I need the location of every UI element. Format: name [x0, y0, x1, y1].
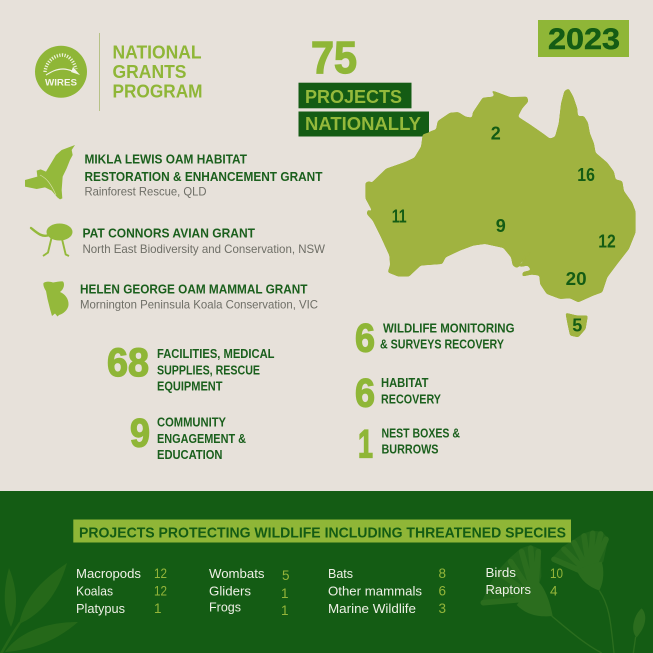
map of Australia with project counts	[365, 88, 636, 337]
decoration: gum blossoms	[481, 531, 645, 653]
map of Australia with project counts: 20	[566, 269, 587, 289]
map of Australia with project counts: 5	[572, 316, 582, 336]
bud	[633, 608, 645, 637]
list column 1	[76, 566, 167, 616]
stat: 6 wildlife monitoring	[355, 317, 514, 361]
flower left	[481, 545, 553, 616]
stat: 68 facilities: SUPPLIES, RESCUE	[157, 363, 260, 377]
stat: 9 community: 9	[130, 412, 150, 456]
map of Australia with project counts: 9	[496, 216, 506, 236]
list column 3: Bats	[328, 567, 353, 581]
stat: 1 nest boxes	[358, 422, 460, 466]
stat: 68 facilities: FACILITIES, MEDICAL	[157, 347, 275, 361]
icon: emu	[31, 224, 72, 256]
map of Australia with project counts: 16	[577, 165, 595, 185]
list column 1: 12	[154, 584, 167, 599]
stat: 1 nest boxes: 1	[358, 422, 373, 466]
title: national grants program	[112, 42, 202, 102]
list column 1: 1	[154, 601, 162, 616]
text: Helen George grant: HELEN GEORGE OAM MAMMAL GRANT	[80, 282, 308, 296]
list column 1: Platypus	[76, 602, 125, 616]
list column 2	[209, 567, 290, 618]
banner: section heading: PROJECTS PROTECTING WILDLIFE INCLUDING THREATENED SPECIES	[79, 524, 566, 541]
stat: 6 habitat recovery: RECOVERY	[381, 392, 442, 406]
stat: 6 wildlife monitoring: 6	[355, 317, 375, 361]
list column 4: 10	[550, 566, 563, 581]
decoration: gum leaves	[0, 563, 78, 653]
map of Australia with project counts: 11	[392, 207, 407, 227]
list column 3: Marine Wildlife	[328, 602, 416, 616]
icon: flying fox	[25, 145, 75, 199]
stat: 6 habitat recovery: HABITAT	[381, 376, 429, 390]
title: national grants program: PROGRAM	[112, 80, 202, 102]
text: Mikla Lewis grant	[84, 153, 323, 198]
stat: 75 projects nationally: NATIONALLY	[305, 114, 421, 134]
list column 2: Frogs	[209, 601, 241, 615]
icon: koala	[43, 281, 69, 316]
text: Pat Connors grant	[82, 226, 326, 256]
year badge	[538, 20, 629, 57]
text: Mikla Lewis grant: RESTORATION & ENHANCEMENT GRANT	[84, 170, 323, 184]
year badge: 2023	[548, 23, 620, 56]
list column 4: Birds	[486, 566, 516, 580]
stat: 6 wildlife monitoring: & SURVEYS RECOVERY	[380, 338, 505, 352]
list column 2: Gliders	[209, 585, 251, 599]
text: Helen George grant: Mornington Peninsula Koala Conservation, VIC	[80, 298, 318, 312]
stat: 68 facilities: 68	[107, 341, 149, 385]
list column 4	[486, 566, 563, 599]
list column 3: 3	[438, 601, 446, 616]
stat: 9 community: ENGAGEMENT &	[157, 432, 246, 446]
stat: 6 habitat recovery	[355, 372, 442, 416]
list column 1: 12	[154, 566, 167, 581]
panel: wildlife species	[0, 491, 653, 653]
list column 2: 5	[282, 568, 290, 583]
stat: 68 facilities: EQUIPMENT	[157, 380, 223, 394]
stat: 9 community: COMMUNITY	[157, 416, 227, 430]
stat: 75 projects nationally	[298, 32, 429, 136]
list column 3: Other mammals	[328, 585, 422, 599]
map of Australia with project counts: 12	[598, 232, 616, 252]
list column 1: Koalas	[76, 585, 113, 599]
text: Helen George grant	[80, 282, 318, 312]
text: Pat Connors grant: North East Biodiversity and Conservation, NSW	[82, 242, 326, 256]
title: national grants program: NATIONAL	[112, 42, 202, 62]
stat: 75 projects nationally: PROJECTS	[305, 87, 402, 107]
list column 3: 8	[438, 566, 446, 581]
stat: 9 community: EDUCATION	[157, 448, 222, 462]
stems	[552, 591, 636, 653]
logo: WIRES echidna badge	[35, 46, 87, 98]
list column 2: 1	[281, 586, 289, 601]
list column 3	[328, 566, 446, 616]
stat: 6 wildlife monitoring: WILDLIFE MONITORING	[383, 321, 514, 335]
list column 3: 6	[438, 584, 446, 599]
flower right	[552, 531, 608, 591]
map of Australia with project counts: 2	[491, 123, 501, 143]
list column 2: Wombats	[209, 567, 264, 581]
stat: 1 nest boxes: BURROWS	[382, 442, 438, 456]
logo: WIRES echidna badge: WIRES	[45, 78, 77, 88]
list column 4: Raptors	[486, 583, 531, 597]
stat: 68 facilities	[107, 341, 275, 394]
stat: 6 habitat recovery: 6	[355, 372, 375, 416]
list column 1: Macropods	[76, 567, 141, 581]
text: Mikla Lewis grant: MIKLA LEWIS OAM HABITAT	[84, 153, 247, 167]
text: Pat Connors grant: PAT CONNORS AVIAN GRANT	[82, 226, 255, 240]
list column 2: 1	[281, 603, 289, 618]
list column 4: 4	[550, 584, 558, 599]
stat: 75 projects nationally: 75	[311, 32, 357, 83]
title: national grants program: GRANTS	[112, 61, 186, 82]
text: Mikla Lewis grant: Rainforest Rescue, QLD	[84, 184, 207, 198]
stat: 1 nest boxes: NEST BOXES &	[382, 426, 460, 440]
stat: 9 community	[130, 412, 246, 462]
